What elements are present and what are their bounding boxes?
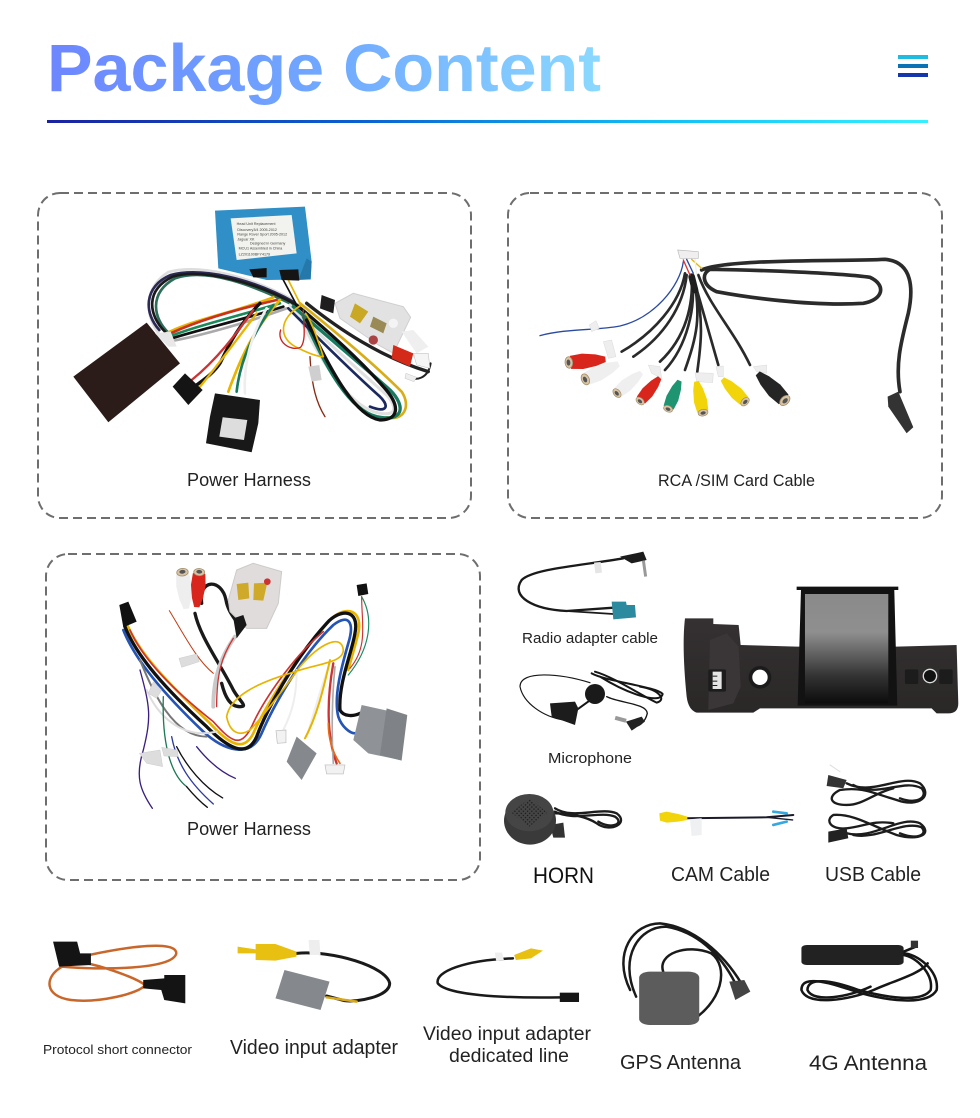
4g antenna photo	[801, 941, 937, 1000]
rca plugs and converter	[174, 563, 282, 638]
item: radio adapter cable	[519, 552, 658, 647]
item: protocol short connector	[43, 942, 193, 1057]
gps antenna photo	[623, 923, 750, 1025]
label: dedicated line	[449, 1046, 569, 1067]
rca cable photo	[540, 250, 913, 433]
panel: rca sim card cable	[508, 193, 942, 518]
label: Power Harness	[187, 470, 311, 490]
label: GPS Antenna	[620, 1052, 742, 1074]
usb cable photo	[827, 765, 925, 843]
item: 4g antenna	[801, 941, 937, 1075]
label: Microphone	[548, 750, 632, 767]
item: usb cable	[825, 765, 925, 886]
black decoder module	[73, 323, 180, 422]
label: Power Harness	[187, 819, 311, 839]
blue module: LZ201100BFY4179	[239, 253, 270, 257]
rca plugs	[564, 352, 793, 417]
title: Package Content	[47, 31, 601, 106]
microphone photo	[520, 672, 663, 731]
label: Protocol short connector	[43, 1042, 193, 1057]
label: RCA /SIM Card Cable	[658, 471, 815, 490]
label: Radio adapter cable	[522, 630, 658, 647]
panel: power harness 1	[38, 193, 471, 518]
header rule	[47, 120, 928, 123]
harness photo 2	[119, 563, 407, 808]
blue module: MCU1 Assembled in China	[239, 246, 283, 250]
label: CAM Cable	[671, 864, 770, 886]
blue module: Head Unit Replacement	[237, 222, 275, 226]
item: video input adapter	[230, 940, 398, 1059]
blue module: Designed in Germany	[250, 242, 286, 246]
blue module: Jaguar XK	[237, 238, 255, 242]
wire tags	[589, 321, 767, 383]
item: cam cable	[659, 812, 793, 886]
white wire connector	[678, 250, 698, 258]
label: Video input adapter	[423, 1024, 592, 1045]
protocol connector photo	[50, 942, 185, 1003]
tags	[139, 654, 199, 767]
item: horn	[504, 794, 621, 888]
label: HORN	[533, 863, 594, 888]
radio cable photo	[519, 552, 647, 619]
camera cable photo	[659, 812, 793, 836]
label: 4G Antenna	[809, 1052, 927, 1075]
blue module	[215, 207, 312, 281]
sim card connector	[888, 392, 913, 433]
dedicated line photo	[438, 948, 579, 1002]
blue module: Range Rover Sport 2005-2012	[237, 233, 287, 237]
translucent audio converter	[320, 293, 430, 368]
item: video input adapter dedicated line	[423, 948, 592, 1067]
video adapter photo	[238, 940, 390, 1010]
panel: power harness 2	[46, 554, 480, 880]
blue module: Discovery3/4 2005-2012	[237, 228, 277, 232]
connectors	[119, 583, 407, 780]
icon: menu	[898, 55, 928, 77]
harness photo 1	[73, 207, 431, 452]
label	[423, 1024, 592, 1067]
item: gps antenna	[620, 923, 750, 1074]
label: Video input adapter	[230, 1037, 398, 1059]
label: USB Cable	[825, 864, 921, 886]
item: microphone	[520, 672, 663, 767]
wire connectors	[173, 365, 417, 452]
head unit with vertical screen	[684, 587, 958, 713]
horn photo	[504, 794, 621, 845]
